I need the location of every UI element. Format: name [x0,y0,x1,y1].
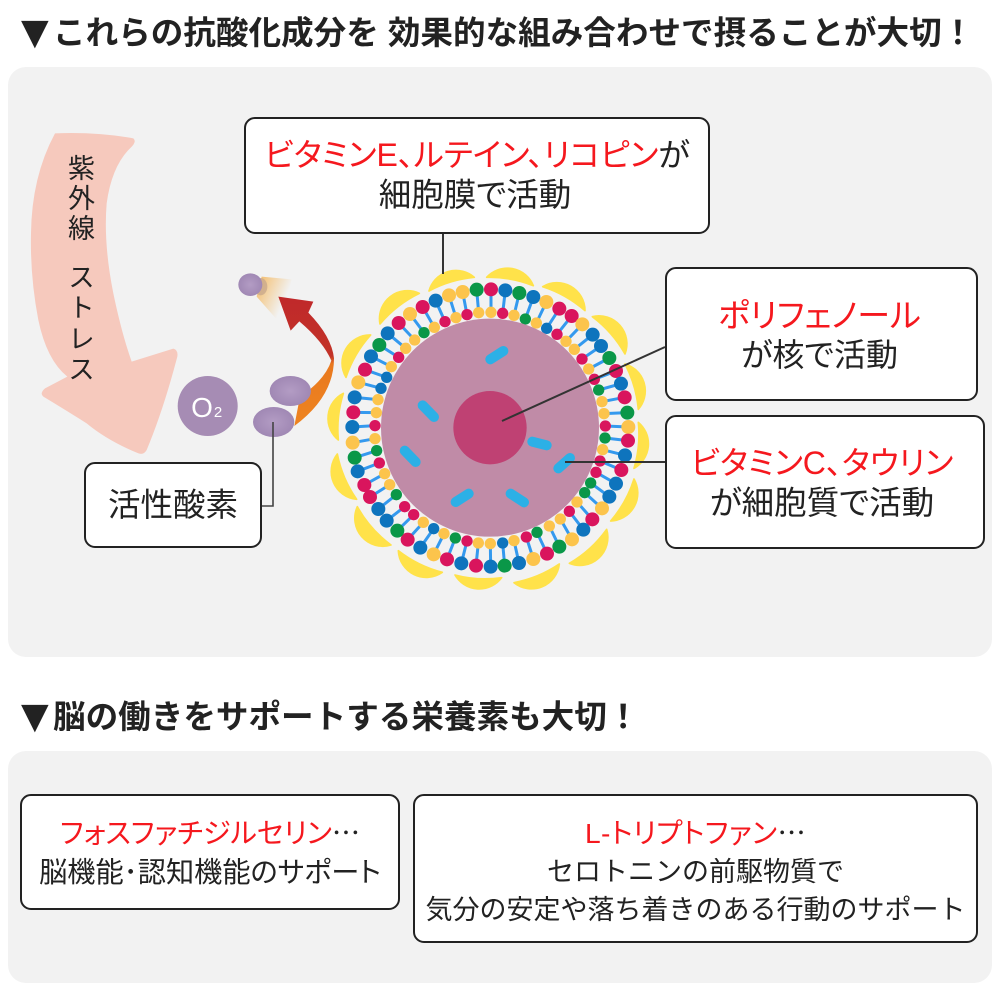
connector: reactive oxygen to label [260,422,273,506]
callout: cell membrane: ビタミンE、ルテイン、リコピンが [264,137,690,173]
heading: brain nutrients: 脳の働きをサポートする栄養素も大切！ [53,698,639,735]
callout: phosphatidylserine: 脳機能･認知機能のサポート [39,856,381,888]
membrane inner heads [369,307,611,549]
arrow: UV stress [31,133,177,454]
icon: O2 molecule [178,376,238,436]
membrane lipid tails [352,289,628,567]
callout: phosphatidylserine: フォスファチジルセリン… [60,811,360,852]
cytoplasm [381,319,599,537]
cytoplasm rods [405,351,570,502]
panel: antioxidant diagram background [8,67,992,657]
callout: L-tryptophan: 気分の安定や落ち着きのある行動のサポート [426,895,966,925]
callout: cytoplasm: が細胞質で活動 [710,485,934,521]
icon: O2 molecule: O [191,392,213,423]
callout: phosphatidylserine [20,794,400,910]
label line: UV: 紫外線 [64,154,94,244]
label: reactive oxygen: 活性酸素 [108,487,238,523]
heading marker: antioxidants: ▼ [21,12,49,53]
heading marker: brain nutrients: ▼ [21,696,49,737]
label line: stress: ストレス [64,263,94,386]
membrane outer heads [345,282,635,574]
heading: antioxidants: これらの抗酸化成分を 効果的な組み合わせで摂ることが大切！ [53,14,974,51]
callout: L-tryptophan [413,794,978,943]
leader lines [443,233,665,462]
label: UV stress [64,154,94,386]
callout: L-tryptophan: L-トリプトファン… [585,811,806,852]
nucleus [453,391,527,464]
yellow outer crescents [328,268,648,589]
callout: nucleus: が核で活動 [741,337,898,373]
panel: brain nutrients background [8,751,992,983]
icon: O2 molecule: 2 [214,404,222,421]
callout: cell membrane [244,117,710,234]
callout: nucleus: ポリフェノール [718,297,921,334]
cell diagram [328,268,648,589]
callout: cell membrane: 細胞膜で活動 [379,177,571,213]
callout: nucleus [665,267,978,401]
icon: reactive oxygen molecules and arrow [238,273,334,437]
callout: cytoplasm [665,415,985,549]
label: reactive oxygen [84,462,262,548]
callout: cytoplasm: ビタミンC、タウリン [691,445,953,481]
callout: L-tryptophan: セロトニンの前駆物質で [547,857,844,887]
